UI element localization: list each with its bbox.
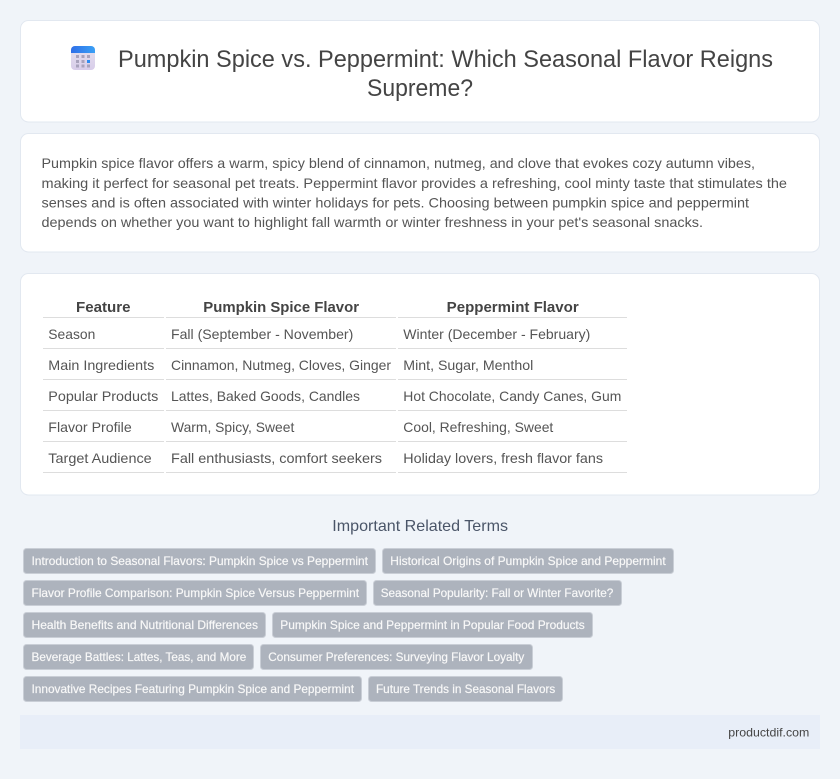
table row: main ingredients: Mint, Sugar, Menthol (403, 357, 533, 373)
tag: Seasonal Popularity: Fall or Winter Favorite? (381, 586, 614, 600)
text block: description (42, 155, 787, 230)
table header (43, 299, 627, 318)
tag (374, 580, 622, 606)
tag (260, 644, 532, 670)
table row: season: Winter (December - February) (403, 326, 590, 342)
tag (382, 548, 674, 574)
footer (20, 715, 820, 749)
text block: description: depends on whether you want to highlight fall warmth or winter freshness in your pet's seasonal snacks. (42, 214, 703, 230)
tag (368, 676, 562, 702)
tag: Introduction to Seasonal Flavors: Pumpkin Spice vs Peppermint (32, 554, 369, 568)
title (118, 46, 773, 102)
tag: Consumer Preferences: Surveying Flavor Loyalty (268, 650, 524, 664)
tag (24, 580, 366, 606)
table row: popular products: Hot Chocolate, Candy Canes, Gum (403, 388, 621, 404)
table row: popular products (43, 388, 627, 411)
heading: important related terms: Important Related Terms (332, 518, 508, 535)
table row: flavor profile: Warm, Spicy, Sweet (171, 419, 294, 435)
table header: Feature (76, 299, 130, 316)
table row: popular products: Popular Products (48, 388, 158, 404)
table row: popular products: Lattes, Baked Goods, Candles (171, 388, 360, 404)
tag: Future Trends in Seasonal Flavors (376, 682, 555, 696)
table row: flavor profile: Cool, Refreshing, Sweet (403, 419, 553, 435)
tag (24, 612, 266, 638)
table row: season: Season (48, 326, 95, 342)
table row: target audience (43, 450, 627, 473)
table row: target audience: Holiday lovers, fresh flavor fans (403, 450, 603, 466)
table row: main ingredients: Cinnamon, Nutmeg, Cloves, Ginger (171, 357, 391, 373)
title: Supreme? (367, 75, 473, 102)
tag: Pumpkin Spice and Peppermint in Popular Food Products (280, 618, 585, 632)
tag: Beverage Battles: Lattes, Teas, and More (32, 650, 247, 664)
table row: flavor profile (43, 419, 627, 442)
text block: description: Pumpkin spice flavor offers a warm, spicy blend of cinnamon, nutmeg, and clove that evokes cozy autumn vibes, (42, 155, 755, 171)
table row: flavor profile: Flavor Profile (48, 419, 132, 435)
tag: Innovative Recipes Featuring Pumpkin Spice and Peppermint (32, 682, 355, 696)
footer: productdif.com (728, 726, 809, 740)
table row: main ingredients: Main Ingredients (48, 357, 154, 373)
table header: Pumpkin Spice Flavor (203, 299, 359, 316)
title: Pumpkin Spice vs. Peppermint: Which Seasonal Flavor Reigns (118, 46, 773, 73)
panel: comparison table (20, 274, 820, 495)
icon: calendar (71, 46, 95, 70)
tag (24, 644, 254, 670)
table row: season (43, 326, 627, 349)
tag: Flavor Profile Comparison: Pumpkin Spice Versus Peppermint (32, 586, 360, 600)
table row: target audience: Fall enthusiasts, comfort seekers (171, 450, 382, 466)
text block: description: senses and is often associated with winter holidays for pets. Choosing between pumpkin spice and peppermint (42, 194, 749, 210)
panel: header (20, 20, 820, 122)
table header: Peppermint Flavor (447, 299, 579, 316)
table row: main ingredients (43, 357, 627, 380)
tag (24, 676, 362, 702)
text block: description: making it perfect for seasonal pet treats. Peppermint flavor provides a refreshing, cool minty taste that stimulates the (42, 175, 787, 191)
table row: target audience: Target Audience (48, 450, 152, 466)
table row: season: Fall (September - November) (171, 326, 353, 342)
panel: description (20, 134, 820, 252)
tag: Health Benefits and Nutritional Differences (32, 618, 258, 632)
tag: Historical Origins of Pumpkin Spice and Peppermint (390, 554, 666, 568)
tag (272, 612, 592, 638)
tag (24, 548, 376, 574)
panel: related term tags (24, 548, 674, 702)
